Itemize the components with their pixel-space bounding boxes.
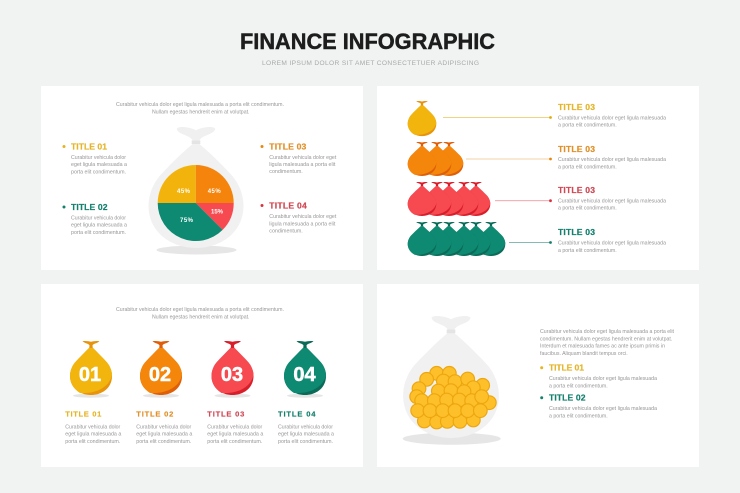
item: title 02: Curabitur vehicula dolor eget ligula malesuada [549, 406, 657, 412]
item: title 02: a porta elit condimentum. [549, 414, 608, 420]
column text 01 [65, 410, 121, 445]
arrow: row 4 [509, 241, 552, 244]
arrow: row 2 [466, 158, 552, 160]
column text 02: Curabitur vehicula dolor [136, 424, 192, 430]
column text 04 [278, 410, 334, 445]
column text 02: porta elit condimentum. [136, 439, 191, 445]
text: row 4: a porta elit condimentum. [558, 248, 617, 254]
item: title 01: Curabitur vehicula dolor [71, 155, 126, 161]
text: row 3 [558, 185, 666, 212]
pie chart [158, 165, 234, 241]
bag outline [403, 316, 499, 438]
bag shadow [156, 246, 236, 254]
item: title 04: ligula malesuada a porta elit [269, 221, 336, 227]
panel: pie chart in bag [41, 86, 363, 270]
item: title 02: Curabitur vehicula dolor [71, 216, 126, 222]
text: row 1: TITLE 03 [558, 102, 595, 112]
item: title 01 [540, 363, 657, 390]
bag 04 [284, 341, 326, 398]
column text 01: TITLE 01 [65, 410, 102, 419]
column text 03 [207, 410, 263, 445]
text: row 4: TITLE 03 [558, 227, 595, 237]
intro text [116, 102, 284, 116]
item: title 01: TITLE 01 [71, 142, 107, 152]
pie chart: 75% [180, 218, 194, 224]
column text 03: Curabitur vehicula dolor [207, 424, 263, 430]
item: title 01: a porta elit condimentum. [549, 384, 608, 390]
text: row 3: TITLE 03 [558, 185, 595, 195]
item: title 03: Curabitur vehicula dolor eget [269, 155, 337, 161]
bag shadow [403, 433, 501, 445]
item: title 01: eget ligula malesuada a [71, 162, 127, 168]
text: row 4: Curabitur vehicula dolor eget ligula malesuada [558, 241, 666, 247]
intro text: Nullam egestas hendrerit enim at volutpat. [152, 110, 250, 116]
column text 03: porta elit condimentum. [207, 439, 262, 445]
column text 02 [136, 410, 192, 445]
column text 02: eget ligula malesuada a [136, 432, 192, 438]
item: title 03: ligula malesuada a porta elit [269, 162, 336, 168]
row 1: yellow bag [408, 101, 436, 136]
text: row 2: a porta elit condimentum. [558, 164, 617, 170]
column text 04: TITLE 04 [278, 410, 316, 419]
bag 04: 04 [293, 364, 316, 386]
item: title 02: TITLE 02 [71, 202, 108, 212]
intro text: Curabitur vehicula dolor eget ligula malesuada a porta elit condimentum. [116, 102, 284, 108]
intro text [116, 307, 284, 320]
column text 04: eget ligula malesuada a [278, 432, 334, 438]
paragraph [540, 329, 675, 357]
paragraph: condimentum. Nullam egestas hendrerit enim at volutpat. [540, 336, 672, 342]
item: title 03: condimentum. [269, 169, 303, 175]
column text 02: TITLE 02 [136, 410, 173, 419]
text: row 3: Curabitur vehicula dolor eget ligula malesuada [558, 198, 666, 204]
column text 01: Curabitur vehicula dolor [65, 424, 121, 430]
bag outline [149, 127, 243, 248]
intro text: Nullam egestas hendrerit enim at volutpat. [152, 314, 250, 320]
row 4: green bags [408, 222, 505, 256]
bag 03 [212, 341, 254, 398]
arrow: row 1 [443, 116, 552, 119]
paragraph: Interdum et malesuada fames ac ante ipsum primis in [540, 344, 665, 350]
item: title 02: eget ligula malesuada a [71, 223, 127, 229]
column text 01: porta elit condimentum. [65, 439, 120, 445]
row 3: red bags [408, 182, 490, 216]
arrow: row 3 [495, 199, 552, 202]
item: title 02: porta elit condimentum. [71, 230, 126, 236]
item: title 03: TITLE 03 [269, 142, 307, 152]
panel: bag of coins [377, 284, 699, 467]
bag 01 [70, 341, 112, 398]
text: row 1: a porta elit condimentum. [558, 123, 617, 129]
item: title 02: TITLE 02 [549, 393, 586, 403]
item: title 01 [62, 142, 127, 176]
item: title 04: TITLE 04 [269, 200, 307, 210]
intro text: Curabitur vehicula dolor eget ligula malesuada a porta elit condimentum. [116, 307, 284, 313]
bag 01: 01 [79, 364, 101, 386]
item: title 01: Curabitur vehicula dolor eget ligula malesuada [549, 376, 657, 382]
item: title 04: Curabitur vehicula dolor eget [269, 214, 337, 220]
item: title 04: condimentum. [269, 229, 303, 235]
text: row 3: a porta elit condimentum. [558, 206, 617, 212]
bag 02: 02 [149, 364, 171, 386]
item: title 03 [260, 142, 337, 175]
subtitle: LOREM IPSUM DOLOR SIT AMET CONSECTETUER ADIPISCING [262, 60, 479, 67]
bag 03: 03 [221, 364, 243, 386]
panel: numbered bags [41, 284, 363, 467]
item: title 02 [62, 202, 127, 236]
text: row 2: TITLE 03 [558, 144, 595, 154]
pie chart: 45% [208, 189, 221, 195]
item: title 01: porta elit condimentum. [71, 170, 126, 176]
text: row 2 [558, 144, 666, 170]
coins [410, 366, 496, 429]
pie chart: 45% [177, 189, 191, 195]
item: title 04 [260, 200, 337, 235]
text: row 1: Curabitur vehicula dolor eget ligula malesuada [558, 115, 666, 121]
paragraph: Curabitur vehicula dolor eget ligula malesuada a porta elit [540, 329, 675, 335]
item: title 02 [540, 393, 657, 420]
pie chart: 15% [211, 210, 224, 216]
bag 02 [140, 341, 182, 398]
item: title 01: TITLE 01 [549, 363, 584, 373]
panel: bag pyramid [377, 86, 699, 270]
title: FINANCE INFOGRAPHIC [240, 29, 495, 54]
column text 04: porta elit condimentum. [278, 439, 333, 445]
paragraph: faucibus. Aliquam blandit tempus orci. [540, 351, 628, 357]
column text 04: Curabitur vehicula dolor [278, 424, 333, 430]
column text 03: eget ligula malesuada a [207, 432, 263, 438]
column text 01: eget ligula malesuada a [65, 432, 121, 438]
text: row 4 [558, 227, 666, 254]
text: row 1 [558, 102, 666, 129]
column text 03: TITLE 03 [207, 410, 244, 419]
text: row 2: Curabitur vehicula dolor eget ligula malesuada [558, 157, 666, 163]
row 2: orange bags [408, 142, 463, 176]
